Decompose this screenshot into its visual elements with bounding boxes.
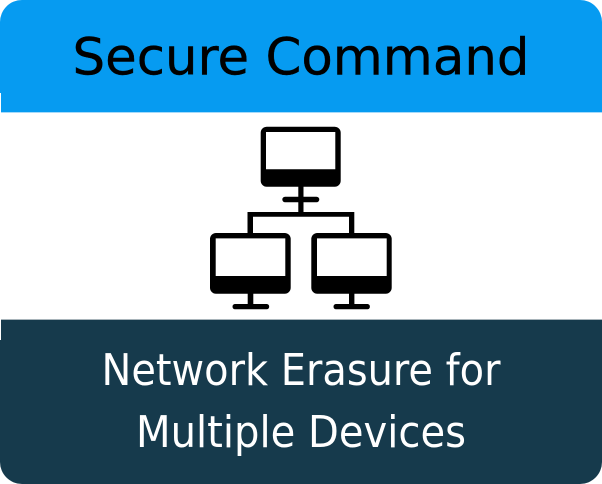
panel: header band: [0, 0, 602, 113]
icon: left monitor: [210, 233, 291, 294]
left monitor stand: [233, 293, 269, 309]
icon: top monitor: [261, 127, 341, 187]
panel: footer band: [0, 319, 602, 484]
connector lines: [248, 186, 354, 234]
right monitor stand: [334, 293, 370, 309]
icon: network of three monitors: [210, 127, 392, 309]
top monitor foot: [282, 197, 319, 202]
text: Network Erasure for: Network Erasure for: [102, 345, 501, 396]
icon: right monitor: [311, 233, 392, 294]
text: Multiple Devices: Multiple Devices: [136, 407, 466, 458]
heading: Secure Command: Secure Command: [72, 28, 530, 88]
